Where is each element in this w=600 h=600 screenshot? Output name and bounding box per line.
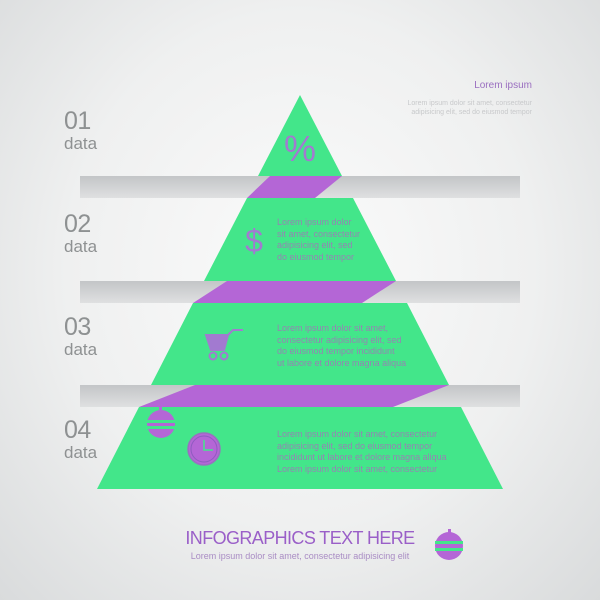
icon: clock <box>188 433 220 465</box>
label 02 <box>64 210 98 256</box>
label 03: data <box>64 340 97 359</box>
purple ribbons <box>139 176 449 407</box>
text tier 4: Lorem ipsum dolor sit amet, consectetur <box>277 429 437 439</box>
label 03 <box>64 313 98 359</box>
text tier 2 <box>277 217 360 262</box>
tier 1 <box>258 95 342 176</box>
text tier 3: consectetur adipisicing elit, sed <box>277 334 402 344</box>
tier 4 <box>97 407 503 489</box>
label 02: 02 <box>64 210 91 238</box>
grey bars <box>80 176 520 407</box>
text tier 4: adipisicing elit, sed do eiusmod tempor <box>277 440 432 450</box>
tier 3 <box>151 303 449 385</box>
icon: dollar: $ <box>245 223 263 259</box>
icon: percent: % <box>284 128 316 169</box>
footer title <box>185 528 415 561</box>
tier 2 <box>204 198 396 281</box>
text tier 4: incididunt ut labore et dolore magna aliqua <box>277 452 447 462</box>
top-right note: Lorem ipsum <box>474 80 532 91</box>
label 04 <box>64 416 98 462</box>
label 01 <box>64 107 98 153</box>
text tier 4 <box>277 429 447 474</box>
text tier 4: Lorem ipsum dolor sit amet, consectetur <box>277 464 437 474</box>
label 04: data <box>64 443 97 462</box>
text tier 2: do eiusmod tempor <box>277 252 354 262</box>
top-right note: Lorem ipsum dolor sit amet, consectetur <box>408 100 532 107</box>
top-right note: adipisicing elit, sed do eiusmod tempor <box>411 109 532 116</box>
label 01: data <box>64 134 97 153</box>
top-right note <box>408 80 532 116</box>
text tier 2: sit amet, consectetur <box>277 228 360 238</box>
text tier 3: Lorem ipsum dolor sit amet, <box>277 323 388 333</box>
label 04: 04 <box>64 416 91 444</box>
text tier 2: adipisicing elit, sed <box>277 240 353 250</box>
footer title: INFOGRAPHICS TEXT HERE <box>185 528 415 548</box>
label 02: data <box>64 237 97 256</box>
footer title: Lorem ipsum dolor sit amet, consectetur adipisicing elit <box>191 551 409 561</box>
text tier 2: Lorem ipsum dolor <box>277 217 352 227</box>
icon: cart <box>206 330 243 360</box>
text tier 3 <box>277 323 406 368</box>
icon: ornament bottom <box>435 529 463 560</box>
text tier 3: do eiusmod tempor incididunt <box>277 346 395 356</box>
label 01: 01 <box>64 107 91 135</box>
icon: ornament <box>147 405 175 438</box>
label 03: 03 <box>64 313 91 341</box>
text tier 3: ut labore et dolore magna aliqua <box>277 358 406 368</box>
